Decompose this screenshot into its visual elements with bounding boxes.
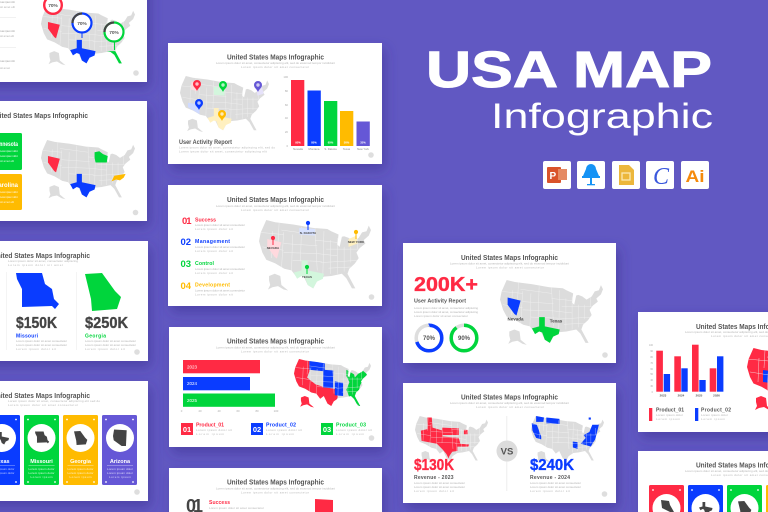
heading: USA MAP: USA MAP <box>426 41 712 98</box>
text block: left lorem: Lorem ipsum dolor <box>0 59 15 63</box>
map: USA with highlighted states <box>41 140 135 199</box>
list item: 02 Management: Lorem ipsum dolor sit amet consectetur <box>195 245 245 249</box>
legend: Product_02 <box>695 408 731 421</box>
ring: blue 70%: 70% <box>77 21 88 27</box>
text block: lorem: Lorem ipsum dolor sit amet consectetur <box>85 339 136 343</box>
bar chart: grouped: 0 <box>652 391 654 394</box>
legend: Product_02 <box>251 422 302 436</box>
text block <box>179 146 275 154</box>
legend: Product_02: Lorem ipsum dolor sit <box>266 428 302 432</box>
bar chart: grouped <box>649 344 723 398</box>
map: USA with states <box>41 6 135 65</box>
card: Carolina <box>0 174 22 210</box>
text block: lorem: Lorem ipsum dolor sit amet consectetur <box>16 343 67 347</box>
card: red <box>649 485 684 512</box>
bar chart: grouped: 90 <box>650 350 654 353</box>
list item: 01 Success: Lorem ipsum dolor sit amet consectetur <box>195 223 245 227</box>
card: Georgia: Lorem ipsum dolor <box>68 467 94 471</box>
legend: Product_03: Lorem ipsum <box>336 432 364 436</box>
list item: 02 Management: 02 <box>180 237 191 248</box>
heading: United States Maps Infographic <box>461 392 558 402</box>
label: Revenue 2024: Revenue - 2024 <box>530 475 570 481</box>
text blocks: Lorem ipsum dolor sit amet consectetur <box>530 481 581 485</box>
value: $130K: $130K <box>414 457 455 474</box>
list item: 02 Management: Lorem ipsum dolor sit <box>195 249 233 253</box>
bar chart: horizontal: 0 <box>181 409 183 413</box>
map: Nevada and Texas <box>500 280 603 345</box>
label: User Activity Report: User Activity Report <box>414 298 466 304</box>
pin: Texas <box>302 265 312 279</box>
legend: Product_01: Product_01 <box>656 408 684 414</box>
state shape: red <box>315 499 333 512</box>
pin: New York: NEW YORK <box>348 240 365 244</box>
panel: revenue VS: Lorem ipsum dolor sit amet consectetur <box>476 405 544 409</box>
bar chart: 50% <box>344 140 350 144</box>
card: Missouri: Lorem ipsum dolor <box>28 471 54 475</box>
list item: 02 Management: Management <box>195 239 230 245</box>
map: 2023 red states <box>415 416 488 462</box>
ring: green 90%: 90% <box>458 336 471 342</box>
VS badge: VS <box>501 446 513 458</box>
value: $250K: $250K <box>85 315 129 332</box>
bar chart: Texas <box>343 147 351 151</box>
bar chart: S. Dakota <box>324 147 337 151</box>
panel: bottom centre list <box>169 468 382 512</box>
icon: PowerPoint: P <box>550 171 556 182</box>
list item: 03 Control: Control <box>195 261 215 267</box>
bar chart: 95% <box>295 140 301 144</box>
panel: Missouri and Georgia: Lorem ipsum dolor sit amet <box>8 263 63 267</box>
bar chart: grouped: 50 <box>650 373 654 376</box>
list item: 01 Success: 01 <box>182 216 192 227</box>
text blocks: Lorem ipsum dolor sit amet consectetur <box>530 485 581 489</box>
bar chart: 0 <box>286 144 288 148</box>
ring: blue 70%: 70% <box>423 336 436 342</box>
panel: bottom centre list: Lorem ipsum dolor sit amet consectetur <box>241 490 309 494</box>
text block: lorem: Lorem ipsum dolor sit <box>16 347 56 351</box>
text block: lorem <box>16 339 136 351</box>
icon: Canva <box>646 161 674 190</box>
pin: yellow <box>218 110 226 121</box>
bar chart: grouped: 100 <box>649 344 654 347</box>
panel: 200K+ user activity <box>403 243 616 363</box>
legend: Product_01: Lorem ipsum <box>196 432 224 436</box>
panel: 200K+ user activity: Lorem ipsum dolor sit amet consectetur <box>476 266 544 270</box>
map: 2024 blue states <box>531 416 604 462</box>
bar chart: New York <box>357 147 370 151</box>
list item: 04 Development: Lorem ipsum dolor sit amet consectetur <box>195 288 245 292</box>
label: Georgia: Georgia <box>85 334 106 340</box>
legend: Product_01: Lorem ipsum <box>656 417 680 421</box>
bar chart: grouped: 2023 <box>660 394 667 398</box>
legend: Product_02: Lorem ipsum <box>266 432 294 436</box>
pin: Nevada: NEVADA <box>267 246 280 250</box>
card: yellow <box>766 485 768 512</box>
panel: four state cards: Lorem ipsum dolor sit amet, consectetur adipiscing elit sed do <box>8 399 100 403</box>
pin: blue <box>195 99 203 110</box>
value: $150K: $150K <box>16 315 58 332</box>
list item: Success: Lorem ipsum dolor sit amet consectetur <box>209 506 264 510</box>
heading: United States Maps Infographic <box>227 478 324 486</box>
panel: revenue VS <box>403 383 616 503</box>
card: green <box>727 485 762 512</box>
panel: numbered list with map: Lorem ipsum dolor sit amet consectetur <box>241 208 309 212</box>
bar chart: horizontal: 20 <box>198 409 202 413</box>
pin: purple <box>254 81 262 92</box>
panel: grouped bars and map <box>638 312 768 432</box>
pin: N. Dakota: N. DAKOTA <box>300 231 317 235</box>
card: Minnesota <box>0 133 22 170</box>
bar chart <box>283 75 370 151</box>
legend: Product_02: 02 <box>253 425 261 434</box>
text block: left lorem: sit amet <box>0 66 10 70</box>
bar chart: grouped: 80 <box>650 356 654 359</box>
heading: United States Maps Infographic <box>461 253 558 262</box>
shape: Missouri <box>16 273 59 309</box>
heading: United States Maps Infographic <box>227 52 324 62</box>
label: Nevada: Nevada <box>507 316 524 322</box>
panel: user activity report bars: Lorem ipsum dolor sit amet consectetur <box>241 65 309 69</box>
card: Georgia: Lorem ipsum <box>70 475 92 479</box>
pin: Texas: TEXAS <box>302 275 312 279</box>
bar chart: grouped: 2024 <box>678 394 685 398</box>
list item: 04 Development <box>180 281 245 296</box>
card: Arizona: Lorem ipsum dolor <box>107 471 133 475</box>
legend: Product_02: Product_02 <box>701 408 731 414</box>
list item: 01 Success: Lorem ipsum dolor sit <box>195 227 233 231</box>
legend: Product_01: Lorem ipsum dolor <box>656 413 683 417</box>
panel: numbered list with map <box>168 185 382 306</box>
legend: Product_01 <box>181 422 232 436</box>
legend: Product_02: Lorem ipsum <box>701 417 726 421</box>
bar chart: horizontal: 2024 <box>187 381 198 386</box>
text block: left lorem: Lorem ipsum dolor <box>0 29 15 33</box>
ring: green 70% <box>104 22 124 50</box>
legend: Product_01 <box>649 408 684 421</box>
legend: Product_01: Product_01 <box>196 422 224 428</box>
panel: bottom centre list: Lorem ipsum dolor sit amet, consectetur adipiscing elit, sed do eiusmod tempor incididunt <box>216 486 335 490</box>
icon: Google Slides <box>612 161 640 189</box>
list item: 03 Control: Lorem ipsum dolor sit <box>195 271 233 275</box>
card: Arizona: Arizona <box>110 459 131 465</box>
panel: horizontal bars with coloured map: Lorem ipsum dolor sit amet consectetur <box>241 350 309 354</box>
ring: green 70%: 70% <box>109 30 120 36</box>
card: Carolina: Lorem ipsum dolor <box>0 190 18 194</box>
text blocks <box>414 481 581 493</box>
bar chart: grouped: 60 <box>650 368 654 371</box>
pin: Nevada <box>267 236 280 250</box>
card: Texas <box>0 415 20 485</box>
bar chart: 80 <box>285 89 288 93</box>
card: Carolina: Lorem ipsum dolor <box>0 195 18 199</box>
bar chart: horizontal: 2025 <box>187 398 198 403</box>
text block: Lorem ipsum dolor sit amet, consectetur adipiscing <box>414 310 478 314</box>
card: Georgia <box>63 415 98 485</box>
bar chart: 20 <box>285 130 288 134</box>
heading: Infographic: Infographic <box>491 97 713 136</box>
icon: Illustrator: Ai <box>686 167 704 186</box>
bar chart: 100 <box>283 75 288 79</box>
card: Missouri: Missouri <box>30 459 53 465</box>
divider <box>506 416 508 491</box>
text block: left lorem: sit amet elit <box>0 5 15 9</box>
card: Minnesota: Lorem ipsum dolor <box>0 149 18 153</box>
bar chart: horizontal <box>181 360 279 413</box>
label: Missouri: Missouri <box>16 334 39 340</box>
panel: 200K+ user activity: Lorem ipsum dolor sit amet, consectetur adipiscing elit, sed do eiusmod tempor incididunt <box>450 262 569 266</box>
bar chart: horizontal: 60 <box>236 409 240 413</box>
bar chart: horizontal: 2023 <box>187 364 198 370</box>
text block: Lorem ipsum dolor sit amet, consectetur adipiscing elit <box>179 150 267 154</box>
VS badge <box>496 440 518 462</box>
list item: 04 Development: Development <box>195 282 230 288</box>
map: coloured regions <box>294 357 371 410</box>
panel: bottom-right cards <box>638 451 768 512</box>
legend: Product_01: Lorem ipsum dolor sit <box>196 428 232 432</box>
text block: Lorem ipsum dolor sit amet, consectetur adipiscing <box>414 306 478 310</box>
text block: left lorem: Lorem ipsum dolor <box>0 0 15 4</box>
panel: Missouri and Georgia <box>0 241 148 361</box>
legend: Product_03: Lorem ipsum dolor sit <box>336 428 372 432</box>
card: Missouri <box>24 415 59 485</box>
icon: Illustrator <box>681 161 709 189</box>
panel: horizontal bars with coloured map: Lorem ipsum dolor sit amet, consectetur adipiscing elit, sed do eiusmod tempor incididunt <box>216 346 335 350</box>
card: Georgia: Georgia <box>70 459 92 465</box>
text block: Lorem ipsum dolor sit amet, consectetur adipiscing elit, sed do <box>179 146 275 150</box>
list item: 04 Development: 04 <box>180 281 192 292</box>
panel: user activity report bars <box>168 43 382 164</box>
legend: Product_03 <box>321 422 372 436</box>
list item: 04 Development: Lorem ipsum dolor sit <box>195 292 233 296</box>
card: Missouri: Lorem ipsum <box>30 475 53 479</box>
legend: Product_01: 01 <box>183 425 191 434</box>
text block: Lorem ipsum dolor sit amet consectetur <box>414 314 468 318</box>
pin: N. Dakota <box>300 221 317 235</box>
ring: blue 70% <box>72 14 92 38</box>
text blocks: Lorem ipsum dolor sit <box>530 489 570 493</box>
ring: blue 70% <box>416 325 442 351</box>
bar chart: 65% <box>328 140 334 144</box>
card: Arizona: Lorem ipsum dolor <box>107 467 133 471</box>
text block: left lorem <box>0 0 16 70</box>
card: Minnesota: sit amet elit <box>0 159 14 163</box>
legend: Product_03: Product_03 <box>336 422 366 428</box>
pin: New York <box>348 230 365 244</box>
bar chart: grouped: 40 <box>650 379 654 382</box>
panel: four state cards <box>0 381 148 501</box>
bar chart: horizontal: 40 <box>217 409 221 413</box>
bar chart: horizontal: 80 <box>255 409 259 413</box>
panel: Missouri and Georgia: Lorem ipsum dolor sit amet, consectetur adipiscing <box>8 259 78 263</box>
card: blue <box>688 485 723 512</box>
text block: left lorem: sit amet elit <box>0 34 14 38</box>
bar chart: grouped: 30 <box>650 385 654 388</box>
card: Minnesota: Lorem ipsum dolor <box>0 154 18 158</box>
value: 200K+: 200K+ <box>414 274 478 296</box>
panel: top-left map rings <box>0 0 147 82</box>
panel: user activity report bars: Lorem ipsum dolor sit amet, consectetur adipiscing elit, sed do eiusmod tempor incididunt <box>216 61 335 65</box>
list item: Success <box>209 500 264 510</box>
list item: 03 Control: 03 <box>180 259 191 270</box>
icon: PowerPoint <box>543 161 571 189</box>
ring: green 90% <box>451 325 477 351</box>
ring: red 70% <box>44 0 62 14</box>
panel: state cards and map <box>0 101 147 221</box>
panel: horizontal bars with coloured map <box>169 327 382 447</box>
text block <box>414 306 478 318</box>
bar chart: 60 <box>285 103 288 107</box>
text block: lorem: Lorem ipsum dolor sit <box>85 347 125 351</box>
icon: Canva: C <box>653 164 670 190</box>
list item: Success: Success <box>209 500 230 506</box>
text blocks: Lorem ipsum dolor sit amet consectetur <box>414 481 465 485</box>
legend: Product_02: Product_02 <box>266 422 296 428</box>
card: Carolina: sit amet elit <box>0 200 14 204</box>
bar chart: 80% <box>311 140 317 144</box>
text block: lorem: Lorem ipsum dolor sit amet consectetur <box>85 343 136 347</box>
pin: red <box>193 80 201 91</box>
heading: User Activity Report: User Activity Report <box>179 140 232 146</box>
bar chart: grouped: 70 <box>650 362 654 365</box>
value: $240K: $240K <box>530 457 575 474</box>
text blocks: Lorem ipsum dolor sit <box>414 489 454 493</box>
text block: lorem: Lorem ipsum dolor sit amet consectetur <box>16 339 67 343</box>
bar chart: 40 <box>285 116 288 120</box>
icon: Keynote <box>577 161 605 189</box>
panel: numbered list with map: Lorem ipsum dolor sit amet, consectetur adipiscing elit, sed do eiusmod tempor incididunt <box>216 204 335 208</box>
bar chart: grouped: 2026 <box>713 394 720 398</box>
legend: Product_02: Lorem ipsum dolor <box>701 413 728 417</box>
list item: 02 Management <box>180 237 245 253</box>
software icons row <box>543 161 709 190</box>
map: labelled states <box>259 220 371 291</box>
label: Texas: Texas <box>550 318 563 324</box>
pin: green <box>219 81 227 92</box>
label: Revenue 2023: Revenue - 2023 <box>414 475 454 481</box>
bar chart: Nevada <box>293 147 303 151</box>
bar chart: grouped: 2025 <box>696 394 703 398</box>
panel: revenue VS: Lorem ipsum dolor sit amet, consectetur adipiscing elit, sed do eiusmod tempor incididunt <box>450 401 569 405</box>
list item: 01 Success: Success <box>195 218 216 224</box>
list item: 01 Success <box>182 216 245 231</box>
shape: Georgia <box>85 273 121 311</box>
bar chart: Montana <box>309 147 320 151</box>
card: Arizona <box>102 415 137 485</box>
legend: Product_03: 03 <box>323 425 331 434</box>
heading: United States Maps Infographic <box>227 195 324 204</box>
text blocks: Lorem ipsum dolor sit amet consectetur <box>414 485 465 489</box>
list item: 03 Control: Lorem ipsum dolor sit amet consectetur <box>195 267 245 271</box>
ring: red 70%: 70% <box>48 3 59 9</box>
card: Georgia: Lorem ipsum dolor <box>68 471 94 475</box>
card: Missouri: Lorem ipsum dolor <box>28 467 54 471</box>
map: pinned states <box>180 76 269 132</box>
card: Arizona: Lorem ipsum <box>109 475 132 479</box>
bar chart: 35% <box>360 140 366 144</box>
panel: four state cards: Lorem ipsum dolor sit amet consectetur <box>8 403 78 407</box>
map: red and blue <box>747 348 768 411</box>
list item: 03 Control <box>180 259 245 275</box>
bar chart: horizontal: 100 <box>274 409 279 413</box>
heading: United States Maps Infographic <box>227 336 324 346</box>
